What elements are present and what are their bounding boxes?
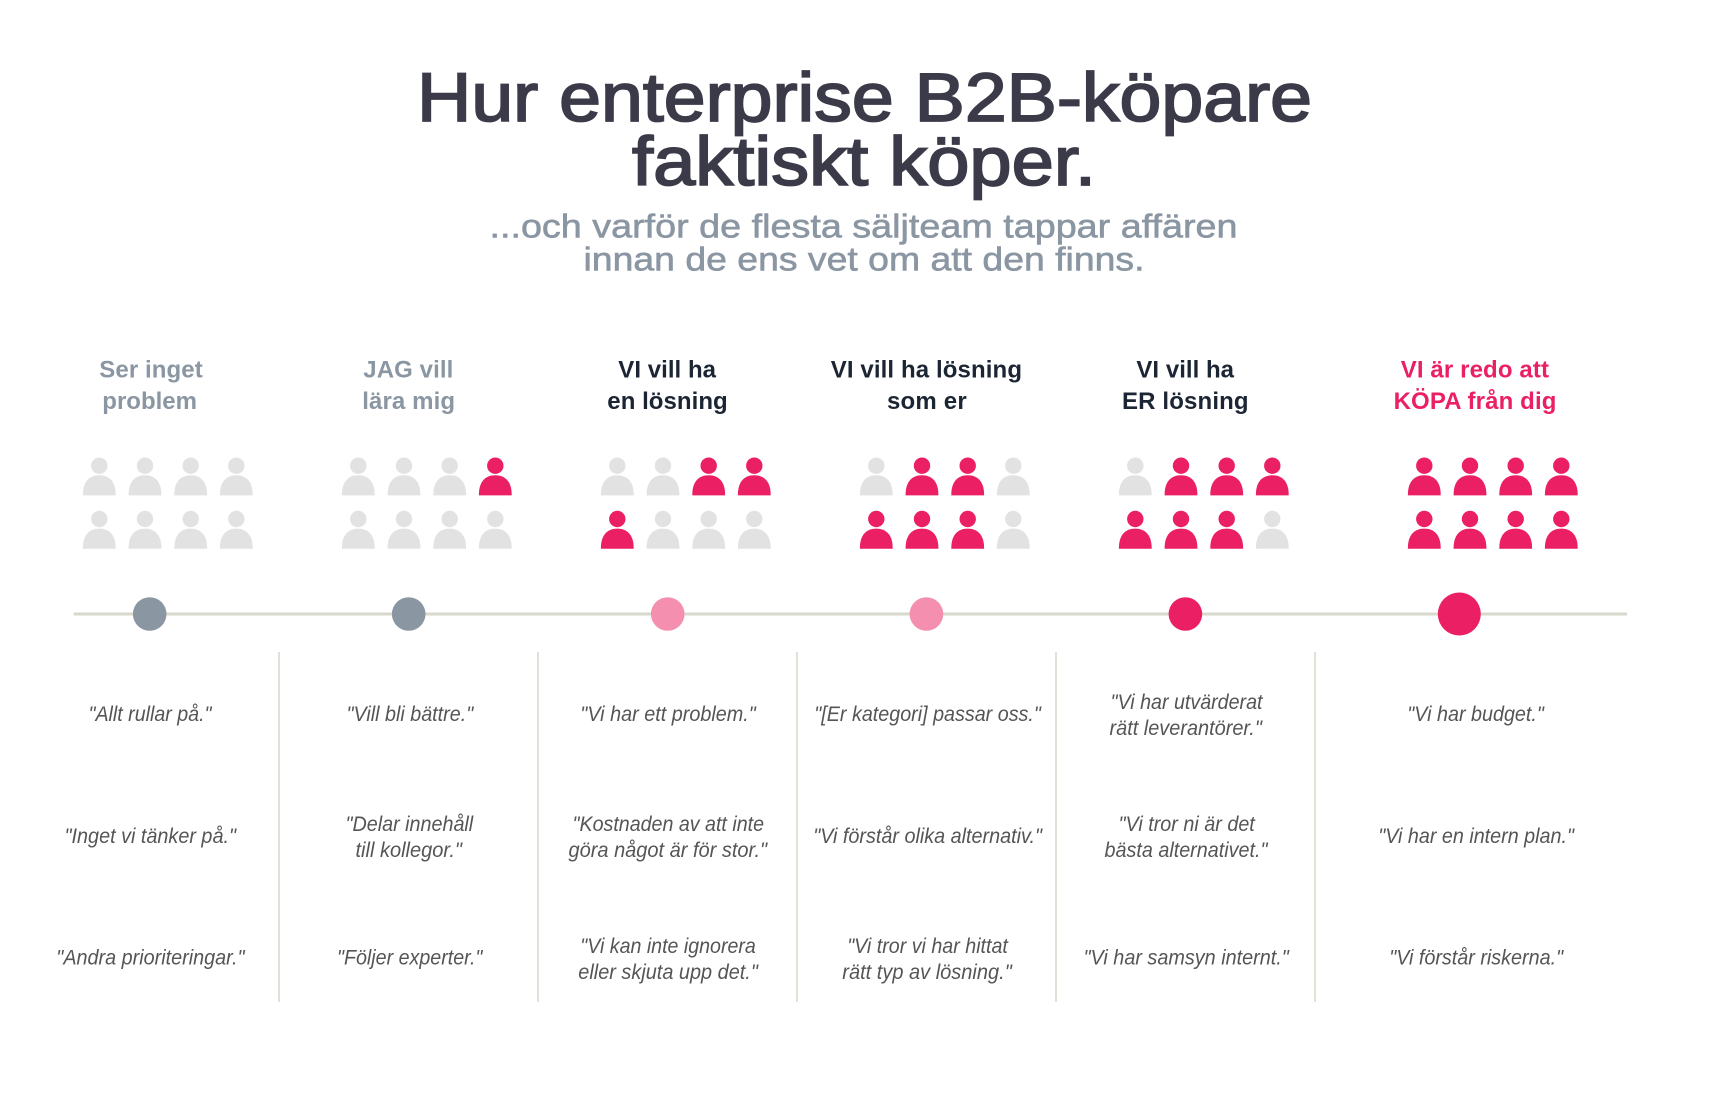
quotes: stage 3: eller skjuta upp det."	[578, 961, 759, 984]
quotes: stage 4: rätt typ av lösning."	[842, 961, 1013, 984]
stage heading: VI vill ha ER lösning: ER lösning	[1122, 388, 1249, 415]
title: Hur enterprise B2B-köpare	[417, 59, 1312, 136]
quotes: stage 1: "Andra prioriteringar."	[56, 946, 246, 970]
dot: stage 6	[1438, 592, 1481, 636]
quotes: stage 3: "Vi har ett problem."	[580, 703, 757, 726]
quotes: stage 2: "Delar innehåll	[346, 813, 474, 836]
stage heading: VI vill ha en lösning: VI vill ha	[618, 356, 717, 384]
stage heading: VI är redo att KÖPA från dig	[1394, 356, 1556, 415]
stage heading: JAG vill lära mig: JAG vill	[363, 356, 453, 384]
stage heading: VI är redo att KÖPA från dig: VI är redo att	[1401, 356, 1549, 384]
quotes: stage 5	[1084, 691, 1290, 970]
stage heading: VI vill ha lösning som er: VI vill ha lösning	[831, 356, 1022, 384]
dot: stage 2	[392, 597, 426, 631]
quotes: stage 4: "[Er kategori] passar oss."	[814, 703, 1042, 726]
quotes: stage 6	[1378, 703, 1575, 970]
stage heading: VI vill ha lösning som er	[831, 356, 1022, 415]
dot: stage 3	[651, 597, 684, 631]
timeline with stage dots	[74, 592, 1627, 636]
stage heading: VI är redo att KÖPA från dig: KÖPA från dig	[1394, 388, 1556, 415]
quotes: stage 2: till kollegor."	[356, 839, 463, 862]
stage heading: VI vill ha lösning som er: som er	[887, 388, 967, 415]
quotes: stage 1: "Allt rullar på."	[88, 703, 213, 726]
stage heading: VI vill ha ER lösning	[1122, 356, 1249, 415]
quotes: stage 5: bästa alternativet."	[1104, 839, 1269, 862]
stage heading: Ser inget problem: Ser inget	[99, 356, 203, 384]
stage heading: Ser inget problem	[99, 356, 203, 415]
title: faktiskt köper.	[632, 123, 1096, 200]
people icons: stage 4, 5 of 8	[860, 458, 1030, 549]
subtitle: ...och varför de flesta säljteam tappar affären	[490, 208, 1238, 246]
quotes: stage 2: "Följer experter."	[337, 946, 484, 970]
dot: stage 4	[910, 597, 943, 631]
quotes: stage 3	[568, 703, 769, 984]
stage heading: JAG vill lära mig	[362, 356, 455, 415]
quotes: stage 5: "Vi tror ni är det	[1118, 813, 1256, 836]
quotes: stage 2	[337, 703, 484, 970]
people icons: stage 6, 8 of 8	[1408, 458, 1578, 549]
subtitle: innan de ens vet om att den finns.	[584, 242, 1144, 278]
quotes: stage 3: "Vi kan inte ignorera	[580, 935, 756, 958]
quotes: stage 5: "Vi har samsyn internt."	[1084, 946, 1290, 970]
subtitle	[490, 208, 1238, 278]
dot: stage 1	[133, 597, 166, 631]
quotes: stage 1	[56, 703, 246, 970]
people icons: stage 5, 6 of 8	[1119, 458, 1289, 549]
quotes: stage 4: "Vi förstår olika alternativ."	[813, 825, 1043, 848]
quotes: stage 3: "Kostnaden av att inte	[572, 813, 764, 836]
quotes: stage 2: "Vill bli bättre."	[346, 703, 475, 726]
quotes: stage 5: rätt leverantörer."	[1110, 717, 1263, 740]
people icons: stage 1, 0 of 8	[83, 458, 253, 549]
people icons: stage 2, 1 of 8	[342, 458, 512, 549]
stage heading: VI vill ha en lösning: en lösning	[607, 388, 728, 415]
people icons: stage 3, 3 of 8	[601, 458, 771, 549]
stage heading: JAG vill lära mig: lära mig	[362, 388, 455, 415]
quotes: stage 3: göra något är för stor."	[568, 839, 769, 862]
quotes: stage 6: "Vi har budget."	[1407, 703, 1545, 726]
quotes: stage 5: "Vi har utvärderat	[1110, 691, 1264, 714]
quotes: stage 1: "Inget vi tänker på."	[64, 825, 237, 848]
quotes: stage 6: "Vi har en intern plan."	[1378, 825, 1575, 848]
dot: stage 5	[1169, 597, 1202, 631]
stage heading: VI vill ha ER lösning: VI vill ha	[1136, 356, 1235, 384]
title	[417, 59, 1312, 200]
quotes: stage 4: "Vi tror vi har hittat	[847, 935, 1009, 958]
stage heading: VI vill ha en lösning	[607, 356, 728, 415]
quotes: stage 4	[813, 703, 1043, 984]
quotes: stage 6: "Vi förstår riskerna."	[1389, 946, 1565, 970]
stage heading: Ser inget problem: problem	[102, 388, 197, 415]
